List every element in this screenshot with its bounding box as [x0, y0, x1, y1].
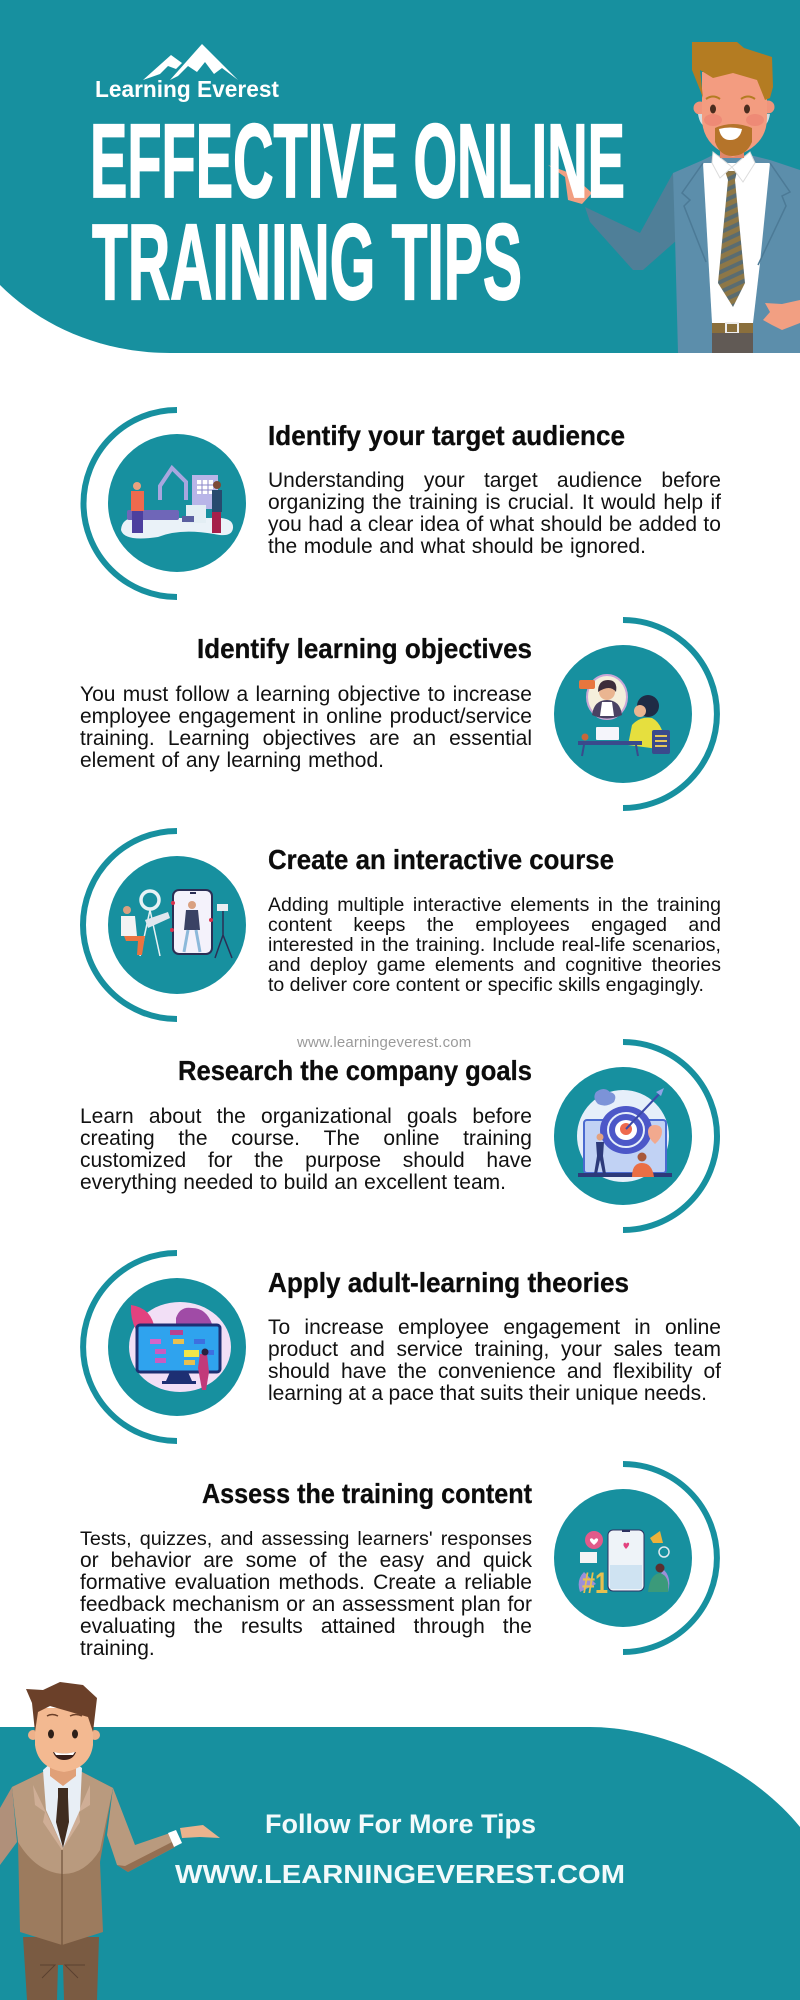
body text: element [80, 749, 155, 772]
body text: in [302, 705, 319, 728]
heading: Apply adult-learning theories [268, 1267, 629, 1298]
body text: essential [449, 727, 532, 750]
body text: through [414, 1615, 485, 1638]
illustration: presenter in blue suit [585, 42, 800, 353]
body text: Learn [80, 1105, 134, 1128]
icon: monitor with flowchart [83, 1253, 246, 1441]
body text: methods. [279, 1571, 365, 1594]
body text: quick [483, 1549, 532, 1572]
body text: target [484, 469, 538, 492]
body text: team. [453, 1171, 506, 1194]
body text: to [703, 513, 721, 536]
body text: excellent [364, 1171, 447, 1194]
body text: deliver [290, 974, 347, 996]
body text: objective [338, 683, 420, 706]
body text: flexibility [613, 1360, 692, 1383]
body text: and [220, 1528, 253, 1550]
body text: Tests, [80, 1528, 132, 1550]
body text: assessing [261, 1528, 349, 1550]
body text: audience [557, 469, 642, 492]
body text: plan [461, 1593, 501, 1616]
body text: of [466, 513, 483, 536]
body text: results [241, 1615, 303, 1638]
body text: in [634, 1316, 651, 1339]
body text: Create [373, 1571, 436, 1594]
body text: a [444, 1571, 456, 1594]
body text: the [268, 535, 297, 558]
body text: online [383, 1127, 439, 1150]
body text: game [377, 954, 426, 976]
body text: your [561, 1338, 602, 1361]
body text: content [268, 914, 332, 936]
website url: WWW.LEARNINGEVEREST.COM [175, 1859, 625, 1889]
body text: employee [80, 705, 171, 728]
body text: multiple [337, 894, 404, 916]
body text: product [268, 1338, 338, 1361]
heading: Research the company goals [178, 1055, 532, 1086]
body text: reliable [464, 1571, 532, 1594]
body text: and [379, 535, 414, 558]
body text: online [326, 705, 382, 728]
body text: the [621, 894, 649, 916]
heading: Identify learning objectives [197, 633, 532, 664]
body text: attained [321, 1615, 396, 1638]
body text: for [208, 1149, 232, 1172]
header banner [0, 0, 800, 353]
logo: Learning Everest: Learning Everest [95, 76, 279, 102]
body text: course. [231, 1127, 300, 1150]
body text [80, 683, 532, 772]
icon: right hand [763, 300, 800, 330]
body text: increase [304, 1316, 384, 1339]
body text: for [507, 1593, 532, 1616]
body text: online [665, 1316, 721, 1339]
body text: engagingly. [606, 974, 704, 996]
body text: elements [435, 954, 514, 976]
panel: apply adult-learning theories [80, 1250, 721, 1444]
body text: a [237, 683, 248, 706]
body text: the [427, 914, 454, 936]
body text: evaluation [175, 1571, 270, 1594]
body text: learners' [357, 1528, 433, 1550]
body text: engagement [178, 705, 295, 728]
body text: are [203, 1549, 234, 1572]
body text: had [308, 513, 343, 536]
body text: interested [268, 934, 354, 956]
body text: idea [420, 513, 459, 536]
body text: the [254, 1149, 283, 1172]
body text: scenarios, [632, 934, 721, 956]
body text: the [217, 1105, 246, 1128]
body text: before [661, 469, 721, 492]
body text: creating [80, 1127, 155, 1150]
body text: team [674, 1338, 721, 1361]
body text: the [503, 1615, 532, 1638]
body text: convenience [438, 1360, 556, 1383]
body text: the [338, 1549, 368, 1572]
body text: their [529, 1382, 570, 1405]
icon: phone recording setup [83, 831, 246, 1019]
body text [268, 1316, 721, 1405]
icon: person on video call [554, 620, 717, 808]
body text: training, [475, 1338, 549, 1361]
body text: and [436, 1549, 471, 1572]
body text: quizzes, [140, 1528, 212, 1550]
body text: ignored. [570, 535, 646, 558]
body text [268, 469, 721, 558]
body text: should [403, 1149, 465, 1172]
panel: create an interactive course [80, 828, 721, 1022]
body text: the [194, 1615, 223, 1638]
body text: To [268, 1316, 290, 1339]
icon: robot arm and workers [84, 410, 246, 597]
body text: training. [80, 727, 155, 750]
heading: Identify your target audience [268, 420, 625, 451]
panel: identify learning objectives [80, 617, 720, 811]
body text: have [341, 1360, 387, 1383]
body text: you [268, 513, 302, 536]
body text: skills [558, 974, 600, 996]
body text: learning [268, 1382, 343, 1405]
body text: build [284, 1171, 328, 1194]
body text: suits [480, 1382, 523, 1405]
body text: engaged [591, 914, 667, 936]
body text: mechanism [172, 1593, 279, 1616]
body text: should [268, 1360, 330, 1383]
title [90, 103, 625, 322]
body text: is [485, 491, 500, 514]
body text: increase [453, 683, 532, 706]
body text: would [601, 491, 656, 514]
body text: The [324, 1127, 360, 1150]
body text: in [360, 934, 375, 956]
icon: phone with feedback symbols: #1 [582, 1567, 608, 1600]
body text: and [523, 954, 556, 976]
body text: interactive [413, 894, 502, 916]
panel: identify your target audience [80, 407, 721, 600]
body text: organizational [261, 1105, 392, 1128]
body text: the [372, 491, 402, 514]
body text: in [598, 894, 613, 916]
body text: a [350, 513, 361, 536]
body text: are [369, 727, 400, 750]
icon: raised hand [548, 165, 592, 204]
body text: evaluating [80, 1615, 176, 1638]
body text: should [472, 535, 534, 558]
body text: purpose [305, 1149, 381, 1172]
body text: elements [510, 894, 589, 916]
body text: the [382, 934, 409, 956]
body text: pace [389, 1382, 434, 1405]
body text: before [472, 1105, 532, 1128]
panel: research the company goals [80, 1039, 720, 1233]
body text: goals [407, 1105, 457, 1128]
illustration: man in tan suit [0, 1682, 220, 2000]
body text: any [186, 749, 220, 772]
body text: an [312, 1593, 335, 1616]
body text: to [260, 1171, 277, 1194]
body text: service [396, 1338, 463, 1361]
body text: the [178, 1127, 208, 1150]
body text: engagement [503, 1316, 620, 1339]
logo: Learning Everest [95, 44, 279, 102]
body text: your [424, 469, 465, 492]
body text: objectives [263, 727, 356, 750]
body text: sales [614, 1338, 663, 1361]
body text: Adding [268, 894, 329, 916]
body text: Include [492, 934, 555, 956]
body text: It [582, 491, 594, 514]
body text: deploy [310, 954, 367, 976]
body text: to [428, 683, 445, 706]
body text: at [348, 1382, 366, 1405]
body text: crucial. [508, 491, 574, 514]
body text: about [149, 1105, 201, 1128]
body text: an [334, 1171, 358, 1194]
body text: clear [368, 513, 413, 536]
body text: specific [488, 974, 553, 996]
body text: the [398, 1360, 427, 1383]
body text: that [440, 1382, 475, 1405]
body text: training [409, 491, 478, 514]
body text: or [465, 974, 482, 996]
body text: product/service [390, 705, 532, 728]
body text: and [567, 1360, 602, 1383]
icon: target and laptop [554, 1042, 717, 1230]
body text: be [540, 535, 563, 558]
body text: training. [80, 1637, 155, 1660]
heading: Create an interactive course [268, 844, 614, 875]
body text: must [123, 683, 168, 706]
body text: easy [380, 1549, 424, 1572]
body text: behavior [111, 1549, 191, 1572]
body text: should [541, 513, 602, 536]
body text [268, 894, 721, 996]
body text: You [80, 683, 115, 706]
body text: if [710, 491, 721, 514]
watermark url: www.learningeverest.com [297, 1034, 471, 1051]
body text: of [309, 1549, 326, 1572]
body text: follow [176, 683, 229, 706]
body text: content [396, 974, 460, 996]
body text: and [350, 1338, 385, 1361]
body text: theories [652, 954, 721, 976]
body text: core [352, 974, 390, 996]
panel: assess the training content [80, 1461, 720, 1660]
body text: Learning [168, 727, 250, 750]
body text: help [663, 491, 703, 514]
follow text: Follow For More Tips [265, 1809, 536, 1839]
body text: what [421, 535, 465, 558]
body text: organizing [268, 491, 365, 514]
body text: a [371, 1382, 383, 1405]
body text: and [268, 954, 301, 976]
body text: responses [441, 1528, 532, 1550]
icon: phone with feedback symbols [554, 1464, 717, 1652]
body text: unique [575, 1382, 638, 1405]
body text: keeps [353, 914, 405, 936]
body text: Understanding [268, 469, 405, 492]
body text: learning [256, 683, 330, 706]
body text: or [286, 1593, 305, 1616]
body text: employees [475, 914, 570, 936]
body text: training [657, 894, 721, 916]
body text: of [703, 1360, 721, 1383]
body text [80, 1105, 532, 1194]
body text: some [246, 1549, 297, 1572]
body text: and [688, 914, 721, 936]
body text: of [162, 749, 179, 772]
body text: training. [416, 934, 485, 956]
body text: to [268, 974, 284, 996]
body text: an [413, 727, 436, 750]
heading: Assess the training content [202, 1478, 532, 1509]
body text: formative [80, 1571, 166, 1594]
body text: or [80, 1549, 99, 1572]
body text: module [304, 535, 373, 558]
body text: feedback [80, 1593, 165, 1616]
body text: training [463, 1127, 532, 1150]
body text: be [609, 513, 632, 536]
body text: learning [227, 749, 301, 772]
body text: needs. [644, 1382, 707, 1405]
body text: what [490, 513, 534, 536]
body text: assessment [342, 1593, 454, 1616]
body text: cognitive [565, 954, 642, 976]
footer banner [0, 1682, 800, 2000]
body text: have [486, 1149, 532, 1172]
body text [80, 1528, 532, 1660]
body text: employee [398, 1316, 489, 1339]
body text: needed [183, 1171, 253, 1194]
body text: everything [80, 1171, 177, 1194]
body text: real-life [561, 934, 625, 956]
body text: method. [308, 749, 384, 772]
body text: customized [80, 1149, 186, 1172]
body text: added [639, 513, 697, 536]
